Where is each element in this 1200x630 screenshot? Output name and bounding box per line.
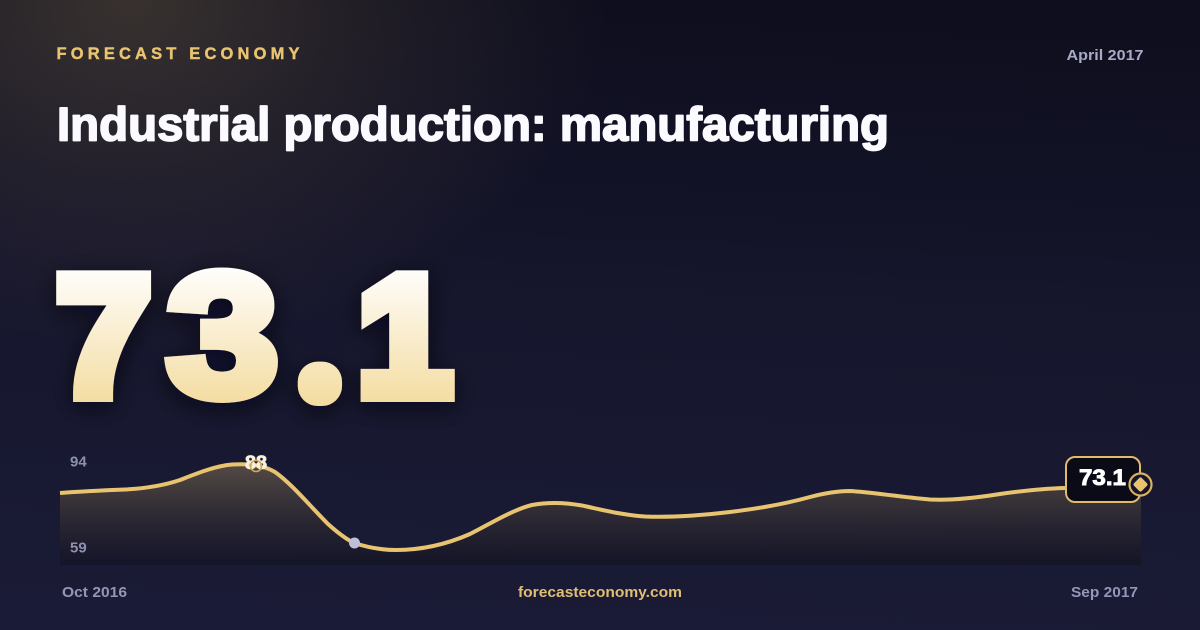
- axis min label: 59: [70, 540, 87, 556]
- low point marker: [349, 538, 360, 548]
- latest value callout: [1066, 457, 1140, 502]
- latest value callout: 73.1: [1079, 465, 1126, 490]
- line chart: [60, 464, 1141, 565]
- headline value: [57, 237, 451, 432]
- headline value: 1: [358, 242, 451, 430]
- chart line: [60, 464, 1065, 550]
- headline value: 3: [167, 237, 278, 432]
- date label: April 2017: [1066, 47, 1144, 64]
- title: Industrial production: manufacturing: [57, 98, 889, 150]
- start date label: Oct 2016: [62, 584, 127, 601]
- brand label: FORECAST ECONOMY: [56, 45, 300, 63]
- headline value: 7: [57, 242, 150, 430]
- latest point marker: [1130, 474, 1152, 496]
- axis max label: 94: [70, 454, 87, 470]
- peak marker: [250, 460, 262, 472]
- headline value: .: [316, 360, 324, 393]
- chart area fill: [60, 464, 1141, 565]
- chart area shading: [60, 464, 1141, 565]
- end date label: Sep 2017: [1071, 584, 1138, 601]
- source website: forecasteconomy.com: [518, 584, 682, 601]
- peak value label: 88: [245, 453, 267, 474]
